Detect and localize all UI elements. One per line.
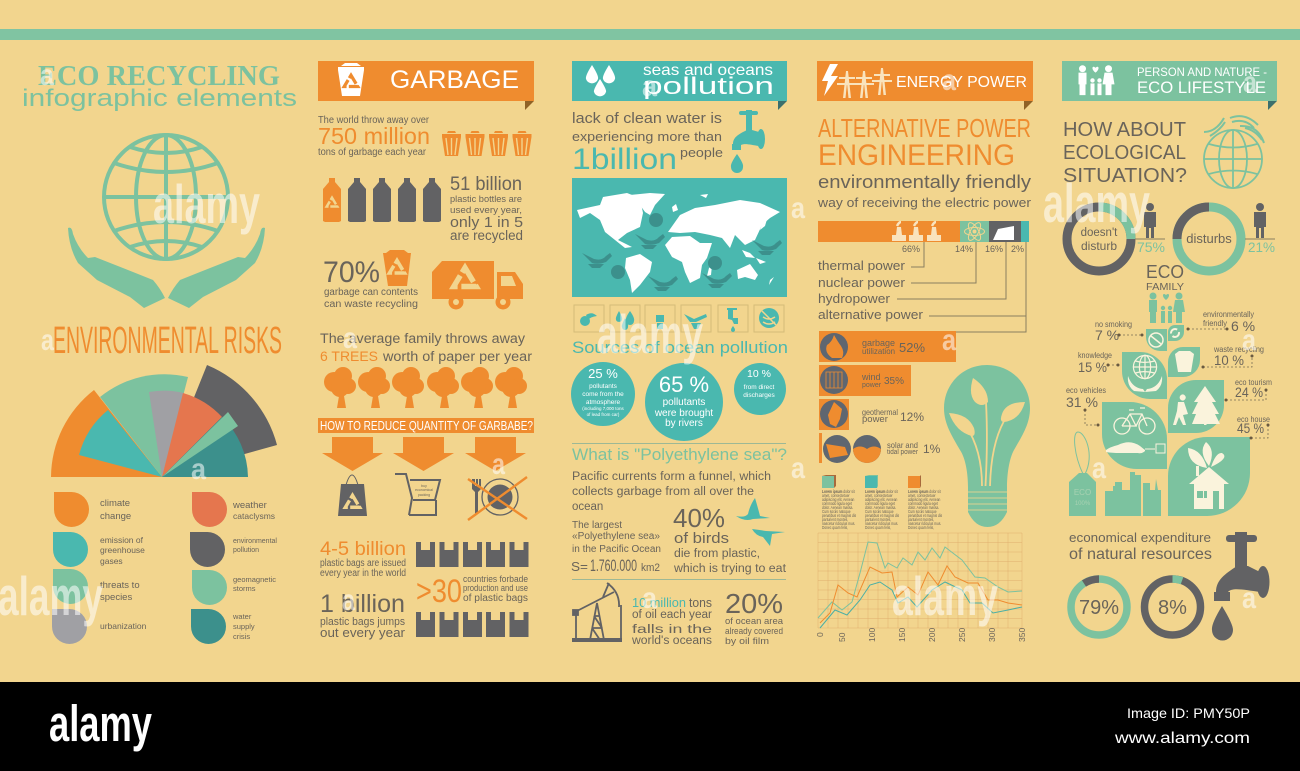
legend: environmental (233, 538, 277, 545)
legend: lorem blocks: adipiscing elit. Aenean (908, 498, 940, 502)
connector lines (897, 242, 1026, 332)
circle: 25 percent: atmosphere (586, 399, 621, 406)
bar chart: alternative energy: wind (861, 372, 881, 382)
icon: six trees (324, 367, 527, 408)
icon: globe (104, 135, 228, 259)
stat: 1 billion (320, 590, 406, 640)
icon: plastic bags bottom row (416, 612, 528, 637)
watermarks: a (791, 192, 805, 225)
icon: shopping cart: buy (421, 484, 427, 488)
heading: ecological situation: ECOLOGICAL (1063, 142, 1186, 164)
watermarks: alamy (153, 173, 260, 235)
circle: 10 percent: discharges (743, 392, 775, 399)
legend: lorem blocks: parturient montes, (865, 518, 891, 522)
donut: doesn't disturb: doesn't (1081, 227, 1118, 239)
donut: 79 percent: 79% (1079, 597, 1119, 619)
legend: emission of (100, 535, 144, 545)
stat: 70 percent (323, 250, 418, 310)
banner: energy power (817, 61, 1033, 110)
stat: 20 percent: of ocean area (725, 616, 784, 627)
fan chart (51, 365, 277, 477)
stacked bar: power sources: 2% (1011, 244, 1024, 254)
donut: 8 percent (1144, 579, 1200, 635)
stat: clean water: 1billion (572, 143, 677, 176)
circle: 25 percent: of lead from car) (587, 412, 620, 417)
circle: 25 percent: pollutants (589, 383, 618, 390)
text: pacific currents: Pacific currents form a funnel, which (572, 471, 771, 483)
bar chart: alternative energy: geothermal (862, 407, 898, 417)
icon: shopping cart: economical (415, 488, 433, 492)
stacked bar: power sources (818, 221, 1029, 254)
panel: energy power (815, 61, 1033, 642)
heading: ecological situation: HOW ABOUT (1063, 119, 1186, 141)
legend: species (100, 592, 132, 603)
legend: lorem blocks: Lorem ipsum dolor sit (822, 490, 855, 494)
panel: environmental risks (51, 320, 282, 644)
stat: clean water (572, 110, 723, 176)
circle: 65 percent: pollutants (663, 397, 705, 408)
stat: largest sea area: 1.760.000 (590, 556, 637, 575)
icon: globe with butterflies (1204, 116, 1264, 188)
banner: eco lifestyle (1062, 61, 1277, 110)
bar chart: alternative energy: 12% (900, 410, 924, 424)
legend: lorem blocks (822, 475, 942, 530)
stat: 51 billion bottles: used every year, (450, 205, 522, 216)
legend: lorem blocks: penatibus et magnis dis (865, 514, 899, 518)
watermarks: a (942, 64, 956, 97)
line chart: 300 (987, 628, 997, 642)
stat: 40 percent birds (673, 503, 787, 575)
bar chart: alternative energy: power (862, 414, 888, 425)
legend: lorem blocks: Lorem ipsum dolor sit (908, 490, 941, 494)
world map (572, 178, 787, 297)
stat: countries: countries forbade (463, 574, 528, 584)
circle: 65 percent: were brought (654, 408, 713, 419)
legend: lorem blocks: amet, consectetuer (822, 494, 850, 498)
legend: lorem blocks: Cum sociis natoque (908, 510, 937, 514)
bar chart: alternative energy: 52% (899, 340, 925, 355)
stat: largest sea area: km2 (641, 562, 660, 574)
stat: 750 million tons: tons of garbage each year (318, 147, 427, 158)
watermarks: a (342, 584, 355, 617)
callouts: eco family percentages: 15 % (1078, 359, 1107, 375)
callouts: eco family percentages: no smoking (1095, 320, 1132, 329)
callouts: eco family percentages: knowledge (1078, 351, 1112, 360)
legend: water (232, 612, 252, 621)
stat: countries (416, 573, 528, 609)
icon: caring hands (68, 228, 265, 308)
line chart: 200 (927, 628, 937, 642)
footer logo: alamy (49, 695, 152, 752)
stat: largest sea area: S= (571, 559, 588, 574)
legend: lorem blocks: Lorem ipsum dolor sit (865, 490, 898, 494)
watermarks: a (343, 322, 357, 355)
legend: climate (100, 498, 130, 509)
legend: lorem blocks: parturient montes, (822, 518, 848, 522)
icon: three down arrows (322, 437, 526, 471)
circle: 25 percent (571, 362, 635, 426)
legend: greenhouse (100, 545, 145, 555)
watermarks: a (642, 582, 657, 615)
callouts: eco family percentages: 31 % (1066, 394, 1098, 410)
heading: polyethylene sea: What is "Polyethylene sea"? (572, 446, 787, 464)
heading: alternative power engineering: way of receiving the electric power (817, 195, 1032, 210)
stat: 70 percent: 70% (323, 256, 380, 289)
bar chart: alternative energy: garbage (862, 338, 895, 348)
bar labels: power types: alternative power (818, 308, 923, 322)
bar chart: alternative energy: tidal power (887, 449, 919, 456)
legend: lorem blocks: commodo ligula eget (822, 502, 853, 506)
line chart: 350 (1017, 628, 1027, 642)
legend: change (100, 511, 131, 522)
legend: lorem blocks: nascetur ridiculus mus. (908, 522, 941, 526)
bar chart: alternative energy: solar and (887, 440, 918, 450)
watermarks: a (40, 59, 54, 92)
heading: eco family: FAMILY (1146, 282, 1184, 293)
callouts: eco family percentages: 6 % (1231, 318, 1255, 334)
circle: 65 percent (645, 363, 723, 441)
legend: pollution (233, 547, 259, 554)
stat: 1 billion: out every year (320, 625, 406, 640)
heading: ENVIRONMENTAL RISKS (53, 320, 282, 362)
icon: person and 21 percent (1245, 203, 1275, 255)
icon: four bins (442, 131, 532, 156)
icon: light bulb with leaves (944, 365, 1030, 527)
stat: 40 percent birds: of birds (674, 531, 729, 547)
icon row: pollution sources (574, 305, 784, 332)
stat: 20 percent (725, 588, 784, 647)
stat: 40 percent birds: which is trying to eat (673, 563, 787, 575)
stat: 4-5 billion: every year in the world (320, 568, 406, 579)
bar labels: power types (818, 259, 923, 322)
legend: lorem blocks: Cum sociis natoque (822, 510, 851, 514)
bar labels: power types: hydropower (818, 292, 890, 306)
line chart: 0 (815, 632, 825, 637)
circle: 10 percent (734, 363, 786, 415)
legend: urbanization (100, 621, 147, 631)
stat: 40 percent birds: die from plastic, (674, 548, 760, 560)
donut: disturbs: disturbs (1186, 231, 1232, 246)
heading: alternative power engineering: environmentally friendly (818, 172, 1031, 192)
legend (52, 492, 277, 644)
banner: seas and oceans pollution (572, 61, 787, 110)
icon: eco tag: ECO (1074, 488, 1091, 497)
title: ECO RECYCLING (38, 61, 280, 92)
icon: shopping cart (395, 474, 440, 515)
line chart: 100 (867, 628, 877, 642)
legend: lorem blocks: Donec quam felis, (822, 526, 848, 530)
heading: alternative power engineering (817, 113, 1032, 210)
stat: countries: >30 (416, 573, 462, 609)
stat: 51 billion bottles: only 1 in 5 (450, 214, 523, 231)
watermarks: alamy (597, 303, 703, 365)
stat: 750 million tons: The world throw away over (318, 115, 430, 126)
stat: largest sea area (571, 520, 661, 575)
stat: oil tons: falls in the (632, 624, 712, 636)
icon: recycling truck (432, 261, 523, 310)
circle: 10 percent: from direct (744, 384, 775, 391)
watermarks: a (791, 452, 805, 485)
bar chart: alternative energy: power (862, 382, 882, 389)
legend: storms (233, 584, 256, 593)
panel: garbage (318, 61, 534, 640)
legend: lorem blocks: amet, consectetuer (865, 494, 893, 498)
legend: lorem blocks: commodo ligula eget (865, 502, 896, 506)
stat: 1 billion: plastic bags jumps (320, 616, 405, 628)
stat: clean water: lack of clean water is (572, 110, 722, 127)
stat: 20 percent: 20% (725, 588, 783, 619)
watermarks: a (191, 453, 206, 486)
callouts: eco family percentages: friendly (1203, 319, 1227, 328)
icon: shopping cart: packing (418, 493, 430, 497)
leaf tree (1102, 325, 1250, 516)
stacked bar: power sources: 16% (985, 244, 1003, 254)
text: economical expenditure: of natural resources (1069, 546, 1212, 563)
stat: 750 million tons (318, 115, 430, 158)
heading: eco family (1146, 262, 1184, 293)
callouts: eco family percentages: eco vehicles (1066, 386, 1106, 395)
line chart: 150 (897, 628, 907, 642)
icon: city skyline (1105, 472, 1161, 516)
banner: garbage (318, 61, 534, 110)
donut: 79 percent (1071, 579, 1127, 635)
bar chart: alternative energy: 35% (884, 376, 904, 387)
stat: 20 percent: already covered (725, 626, 783, 637)
icon: eco bag (338, 475, 367, 516)
bar labels: power types: thermal power (818, 259, 905, 273)
legend: supply (233, 622, 255, 631)
legend: lorem blocks: amet, consectetuer (908, 494, 936, 498)
heading: ecological situation: SITUATION? (1063, 165, 1187, 187)
stat: paper per year: The average family throws away (320, 331, 525, 346)
footer image id: Image ID: PMY50P (1127, 705, 1250, 721)
text: economical expenditure: economical expenditure (1069, 530, 1211, 545)
callouts: eco family percentages: eco tourism (1235, 378, 1272, 387)
heading: alternative power engineering: ENGINEERING (818, 139, 1015, 172)
stat: 51 billion bottles: plastic bottles are (450, 194, 522, 205)
reduce heading bar: HOW TO REDUCE QUANTITY OF GARBABE? (320, 418, 533, 433)
icon: family (1149, 292, 1185, 323)
stat: 4-5 billion: plastic bags are issued (320, 558, 406, 569)
heading: sources of ocean pollution: Sources of ocean pollution (572, 338, 788, 357)
text: pacific currents (572, 471, 771, 513)
watermarks: a (41, 324, 54, 357)
legend: geomagnetic (233, 575, 276, 584)
circle: 25 percent: 25 % (588, 366, 618, 381)
stat: paper per year (320, 331, 533, 364)
stat: oil tons: 10 million (632, 596, 686, 610)
watermarks: a (492, 448, 505, 481)
stat: oil tons (631, 596, 712, 647)
icon: eco tag: 100% (1075, 501, 1091, 507)
stat: 750 million tons: 750 million (318, 123, 430, 149)
callouts: eco family percentages (1066, 310, 1272, 440)
stat: 40 percent birds: 40% (673, 503, 725, 533)
heading: alternative power engineering: ALTERNATIVE POWER (818, 113, 1031, 143)
legend: lorem blocks: Donec quam felis, (865, 526, 891, 530)
circle: 10 percent: 10 % (747, 368, 771, 380)
icon: faucet with drop (1212, 532, 1270, 640)
banner: seas and oceans pollution: seas and oceans (643, 62, 773, 79)
callouts: eco family percentages: 10 % (1214, 352, 1244, 368)
callouts: eco family percentages: 45 % (1237, 420, 1264, 436)
line chart (815, 533, 1027, 642)
text: pacific currents: ocean (572, 501, 603, 513)
legend: lorem blocks: Cum sociis natoque (865, 510, 894, 514)
donut: 8 percent: 8% (1158, 597, 1187, 619)
watermarks: a (642, 70, 657, 103)
callouts: eco family percentages: 7 % (1095, 327, 1119, 343)
donut: doesn't disturb (1067, 207, 1131, 271)
circle: 65 percent: 65 % (659, 372, 709, 397)
legend: lorem blocks: parturient montes, (908, 518, 934, 522)
text: economical expenditure (1069, 530, 1212, 563)
stat: paper per year: 6 TREES (320, 349, 378, 364)
footer bar (0, 682, 1300, 771)
legend: lorem blocks: adipiscing elit. Aenean (865, 498, 897, 502)
stat: countries: production and use (463, 583, 528, 593)
icon: plastic bags top row (416, 542, 528, 567)
watermarks (0, 59, 1257, 627)
icon: person and 75 percent (1135, 203, 1165, 255)
donut: disturbs (1177, 207, 1241, 271)
icon: faucet with drop (731, 110, 765, 173)
stat: 70 percent: can waste recycling (324, 299, 418, 310)
stat: 51 billion bottles: 51 billion (450, 174, 522, 195)
legend: lorem blocks: dolor. Aenean massa. (865, 506, 896, 510)
callouts: eco family percentages: environmentally (1203, 310, 1254, 319)
legend: lorem blocks: dolor. Aenean massa. (908, 506, 939, 510)
stat: largest sea area: in the Pacific Ocean (572, 544, 661, 555)
legend: lorem blocks: dolor. Aenean massa. (822, 506, 853, 510)
icon: person and 21 percent: 21% (1248, 239, 1275, 255)
banner: seas and oceans pollution: pollution (643, 73, 774, 100)
circle: 25 percent: come from the (582, 391, 624, 398)
panel: seas and oceans (571, 61, 788, 647)
line chart: 250 (957, 628, 967, 642)
heading: eco family: ECO (1146, 262, 1184, 282)
icon: person and 75 percent: 75% (1137, 239, 1165, 255)
top band (0, 29, 1300, 40)
banner: eco lifestyle: ECO LIFESTYLE (1137, 78, 1266, 97)
heading: ecological situation (1063, 119, 1187, 187)
watermarks: alamy (0, 565, 103, 627)
stat: 51 billion bottles: are recycled (450, 228, 523, 243)
footer url: www.alamy.com (1114, 730, 1250, 747)
legend: lorem blocks: Donec quam felis, (908, 526, 934, 530)
legend: threats to (100, 580, 140, 591)
bar chart: alternative energy (819, 331, 956, 463)
stat: largest sea area: The largest (572, 520, 622, 531)
donut: doesn't disturb: disturb (1081, 239, 1117, 253)
legend: lorem blocks: commodo ligula eget (908, 502, 939, 506)
watermarks: a (942, 324, 956, 357)
text: pacific currents: collects garbage from all over the (572, 486, 754, 498)
stat: countries: of plastic bags (463, 593, 528, 604)
watermarks: alamy (1043, 172, 1150, 234)
panel: eco recycling intro (22, 61, 297, 308)
legend: lorem blocks: adipiscing elit. Aenean (822, 498, 854, 502)
subtitle: infographic elements (22, 85, 297, 112)
bar chart: alternative energy: utilization (862, 347, 895, 356)
icon: crossed-out plate (468, 477, 527, 520)
stat: 70 percent: garbage can contents (324, 287, 418, 298)
stacked bar: power sources: 66% (902, 244, 920, 254)
circle: 65 percent: by rivers (665, 418, 703, 429)
legend: crisis (233, 632, 250, 641)
stat: 51 billion bottles (450, 174, 523, 243)
legend: lorem blocks: penatibus et magnis dis (908, 514, 942, 518)
legend: weather (232, 500, 267, 511)
stat: 1 billion: 1 billion (320, 590, 405, 618)
watermarks: a (1242, 582, 1256, 615)
banner: eco lifestyle: PERSON AND NATURE - (1137, 67, 1267, 79)
leaf icons (1106, 329, 1229, 509)
legend: gases (100, 556, 123, 566)
watermarks: a (1243, 66, 1257, 99)
line chart: 50 (837, 632, 847, 642)
watermarks: a (1092, 452, 1106, 485)
stat: clean water: experiencing more than (572, 129, 722, 144)
bar labels: power types: nuclear power (818, 276, 905, 290)
callouts: eco family percentages: waste recycling (1213, 345, 1264, 354)
stat: 20 percent: by oil film (725, 636, 769, 647)
stat: oil tons: tons (689, 596, 712, 610)
legend: lorem blocks: penatibus et magnis dis (822, 514, 856, 518)
callouts: eco family percentages: 24 % (1235, 384, 1263, 400)
callouts: eco family percentages: eco house (1237, 415, 1270, 424)
stat: clean water: people (680, 145, 723, 160)
bar chart: alternative energy: 1% (923, 442, 941, 456)
panel: eco lifestyle (1062, 61, 1277, 640)
watermarks: alamy (892, 565, 998, 627)
stat: paper per year: worth of paper per year (382, 349, 533, 364)
legend: cataclysms (233, 511, 275, 521)
stat: 4-5 billion (320, 539, 406, 579)
legend: lorem blocks: nascetur ridiculus mus. (865, 522, 898, 526)
stat: 4-5 billion: 4-5 billion (320, 539, 406, 560)
banner: energy power: ENERGY POWER (896, 74, 1027, 91)
legend: lorem blocks: nascetur ridiculus mus. (822, 522, 855, 526)
icon: plastic bottles (323, 178, 441, 222)
icon: eco tag (1069, 432, 1096, 516)
banner: garbage: GARBAGE (390, 66, 519, 94)
icon: birds (736, 498, 785, 546)
stat: oil tons: of oil each year (632, 609, 712, 621)
watermarks: a (1242, 324, 1256, 357)
stat: largest sea area: «Polyethylene sea» (572, 531, 661, 542)
circle: 25 percent: (including 7,000 tons (582, 406, 625, 411)
icon: oil pumpjack (572, 583, 622, 642)
stat: oil tons: world's oceans (631, 635, 712, 647)
stacked bar: power sources: 14% (955, 244, 973, 254)
